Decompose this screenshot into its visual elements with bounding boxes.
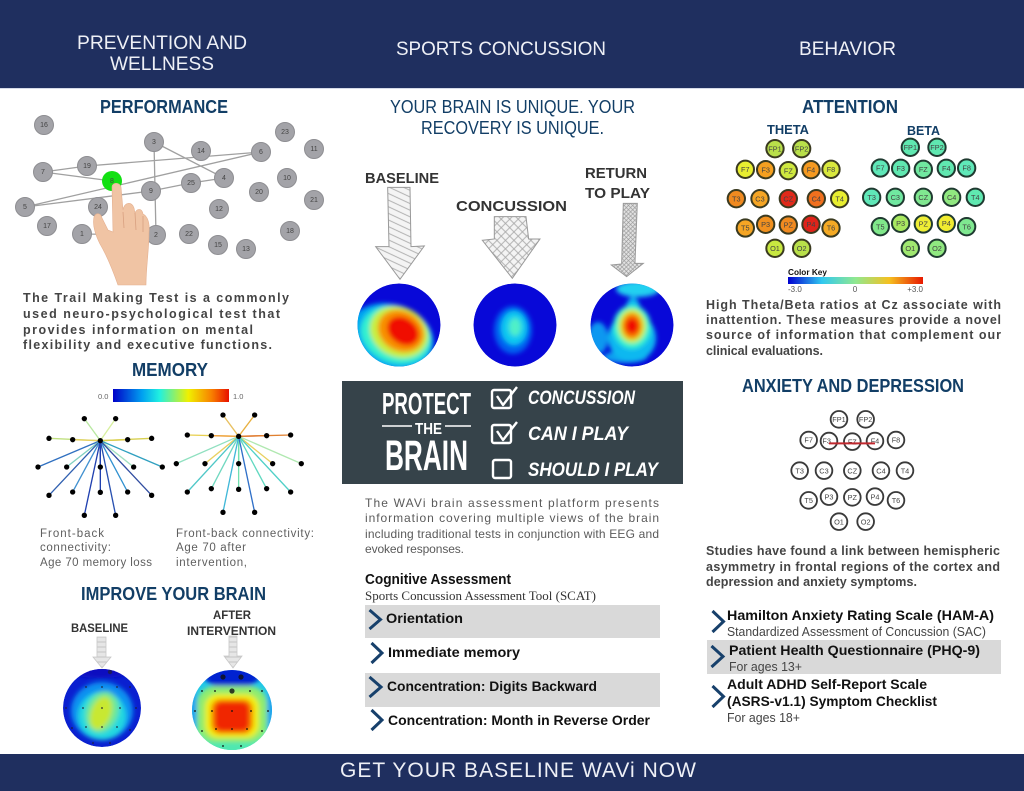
trail making test diagram: 11 <box>310 146 318 153</box>
chart: frontal asymmetry electrode map <box>791 411 913 530</box>
text: hemispheric asymmetry description: asymmetry in frontal regions of the cortex and <box>706 560 1000 574</box>
chart: theta electrode map: PZ <box>784 221 794 230</box>
heading: your brain is unique <box>390 97 635 138</box>
connectivity color bar <box>98 389 243 402</box>
list: rating scales: For ages 18+ <box>727 711 800 725</box>
label: return to play <box>585 165 650 202</box>
trail making test diagram: 14 <box>197 148 205 155</box>
chart: theta electrode map: F3 <box>761 165 770 174</box>
list: SCAT items: Orientation <box>386 610 463 626</box>
trail making test diagram <box>16 116 324 285</box>
heading: attention: ATTENTION <box>802 97 898 117</box>
label: after intervention: INTERVENTION <box>187 624 276 638</box>
trail making test diagram: 15 <box>214 242 222 249</box>
chart: frontal asymmetry electrode map: T6 <box>892 496 900 505</box>
chart: theta electrode map: F4 <box>807 165 815 174</box>
trail making test diagram: 9 <box>149 188 153 195</box>
trail making test diagram: 18 <box>286 228 294 235</box>
heatmap: baseline <box>358 284 440 366</box>
text: platform description: information covering multiple views of the brain <box>365 511 659 525</box>
heading: your brain is unique: YOUR BRAIN IS UNIQUE. YOUR <box>390 97 635 117</box>
chart: beta electrode map: FP2 <box>930 143 944 152</box>
chart: frontal asymmetry electrode map: F8 <box>892 436 900 445</box>
subheading: SCAT: Sports Concussion Assessment Tool (SCAT) <box>365 588 596 603</box>
label: beta: BETA <box>907 123 941 138</box>
trail making test diagram: 17 <box>43 223 51 230</box>
chart: frontal asymmetry electrode map: C4 <box>876 466 886 475</box>
text: theta beta description: High Theta/Beta ratios at Cz associate with <box>706 298 1001 312</box>
chart: beta electrode map: F3 <box>896 164 905 173</box>
trail making test diagram: 4 <box>222 175 226 182</box>
text: trail making test description: The Trail Making Test is a commonly <box>23 291 289 305</box>
heatmap: return to play <box>588 281 674 366</box>
trail making test diagram: 12 <box>215 206 223 213</box>
caption: memory loss: connectivity: <box>40 542 111 554</box>
chart: frontal asymmetry electrode map: O1 <box>834 517 844 526</box>
chart: theta electrode map: FP2 <box>795 144 808 153</box>
panel: sports concussion <box>339 97 683 730</box>
caption: memory loss: Front-back <box>40 528 104 540</box>
banner: protect the brain chalkboard <box>342 381 683 484</box>
heatmap: concussion <box>474 284 556 366</box>
color key legend: 0 <box>853 285 858 294</box>
chart: beta electrode map: T3 <box>867 193 876 202</box>
trail making test diagram: 6 <box>259 149 263 156</box>
header: prevention and wellness: PREVENTION AND <box>77 33 247 54</box>
chart: beta electrode map: FZ <box>919 165 928 174</box>
arrow: after intervention <box>224 636 242 668</box>
checklist: CAN I PLAY <box>528 424 630 445</box>
chart: frontal asymmetry electrode map: O2 <box>861 517 871 526</box>
trail making test diagram: 5 <box>23 204 27 211</box>
text: theta beta description: clinical evaluations. <box>706 344 823 358</box>
text: trail making test description: provides information on mental <box>23 323 253 337</box>
label: baseline: BASELINE <box>365 170 439 187</box>
chart: theta electrode map: T6 <box>827 224 835 233</box>
caption: after intervention: Age 70 after <box>176 542 246 554</box>
footer call to action: GET YOUR BASELINE WAVi NOW <box>340 759 696 782</box>
checklist: SHOULD I PLAY <box>528 460 660 481</box>
chart: theta electrode map <box>728 140 848 257</box>
label: after intervention: AFTER <box>213 608 251 622</box>
chart: beta electrode map: P3 <box>896 219 905 228</box>
chart: frontal asymmetry electrode map: PZ <box>848 493 858 502</box>
chart: frontal asymmetry electrode map: FP2 <box>859 415 872 424</box>
chart: beta electrode map: CZ <box>918 193 929 202</box>
trail making test diagram: 25 <box>187 180 195 187</box>
footer banner <box>0 754 1024 791</box>
label: baseline: BASELINE <box>71 621 128 635</box>
text: theta beta description: inattention. These measures provide a novel <box>706 313 1001 327</box>
list: rating scales: Patient Health Questionnaire (PHQ-9) <box>729 642 980 658</box>
arrow: baseline <box>93 637 111 668</box>
chart: frontal asymmetry electrode map: T5 <box>804 496 813 505</box>
trail making test diagram: 7 <box>41 169 45 176</box>
color key legend: +3.0 <box>907 285 924 294</box>
caption: memory loss <box>40 528 152 569</box>
text: hemispheric asymmetry description: depression and anxiety symptoms. <box>706 575 917 589</box>
heading: cognitive assessment: Cognitive Assessment <box>365 572 511 588</box>
trail making test diagram: 21 <box>310 197 318 204</box>
header: prevention and wellness <box>77 33 247 75</box>
chart: frontal asymmetry electrode map: F7 <box>804 436 813 445</box>
label: return to play: RETURN <box>585 165 647 182</box>
chart: beta electrode map: C3 <box>891 193 900 202</box>
chart: beta electrode map: T6 <box>962 222 971 231</box>
label: return to play: TO PLAY <box>585 185 650 202</box>
list: SCAT items: Immediate memory <box>388 644 520 660</box>
trail making test diagram: 13 <box>242 246 250 253</box>
connectivity color bar: 0.0 <box>98 392 108 401</box>
chart: beta electrode map: T5 <box>876 222 885 231</box>
chart: theta electrode map: F8 <box>827 165 835 174</box>
trail making test diagram: 20 <box>255 189 263 196</box>
trail making test diagram: 8 <box>110 178 114 185</box>
header: prevention and wellness: WELLNESS <box>110 54 214 75</box>
caption: after intervention: intervention, <box>176 557 247 569</box>
text: platform description: evoked responses. <box>365 542 464 556</box>
trail making test diagram: 24 <box>94 204 102 211</box>
text: platform description: The WAVi brain assessment platform presents <box>365 496 659 510</box>
trail making test diagram: 23 <box>281 129 289 136</box>
text: theta beta description <box>706 298 1001 358</box>
header banner <box>0 0 1024 89</box>
arrow: return to play <box>611 203 643 277</box>
chart: theta electrode map: O1 <box>770 244 780 253</box>
chart: theta electrode map: CZ <box>783 194 794 203</box>
text: hemispheric asymmetry description <box>706 544 1000 589</box>
trail making test diagram: 16 <box>40 122 48 129</box>
arrow: baseline <box>376 187 424 279</box>
label: after intervention <box>187 608 276 638</box>
trail making test diagram: 22 <box>185 231 193 238</box>
chart: beta electrode map: O1 <box>905 244 915 253</box>
chart: frontal asymmetry electrode map: FP1 <box>832 415 846 424</box>
title: protect the brain: PROTECT <box>382 386 471 421</box>
chart: theta electrode map: F7 <box>741 165 750 174</box>
list: SCAT items: Concentration: Digits Backward <box>387 678 597 694</box>
heading: performance: PERFORMANCE <box>100 97 228 117</box>
chart: frontal asymmetry electrode map: F4 <box>871 437 879 446</box>
checklist: CONCUSSION <box>528 388 636 409</box>
panel: prevention and wellness <box>16 97 324 756</box>
heading: memory: MEMORY <box>132 360 208 380</box>
chart: theta electrode map: T5 <box>741 224 750 233</box>
header: behavior: BEHAVIOR <box>799 39 896 60</box>
chart: theta electrode map: FZ <box>784 166 793 175</box>
chart: beta electrode map: C4 <box>947 193 956 202</box>
chart: theta electrode map: T3 <box>732 194 741 203</box>
chart: beta electrode map: F4 <box>942 164 951 173</box>
label: concussion: CONCUSSION <box>456 198 567 215</box>
icon: pointing hand <box>93 183 149 285</box>
chart: frontal asymmetry electrode map: F3 <box>822 437 831 446</box>
trail making test diagram: 3 <box>152 139 156 146</box>
chart: frontal asymmetry electrode map: T3 <box>795 466 804 475</box>
text: trail making test description: used neuro-psychological test that <box>23 307 281 321</box>
chart: theta electrode map: O2 <box>797 244 807 253</box>
list: rating scales: Hamilton Anxiety Rating Scale (HAM-A) <box>727 607 994 623</box>
list: rating scales <box>707 607 1001 725</box>
color key legend <box>788 267 924 294</box>
title: protect the brain: THE <box>415 421 442 438</box>
chart: theta electrode map: C3 <box>755 194 765 203</box>
text: platform description: including traditional tests in conjunction with EEG and <box>365 527 659 541</box>
chart: beta electrode map <box>863 139 984 257</box>
text: trail making test description <box>23 291 289 352</box>
color key legend: -3.0 <box>788 285 802 294</box>
chart: frontal asymmetry electrode map: P3 <box>825 492 833 501</box>
heading: your brain is unique: RECOVERY IS UNIQUE. <box>421 118 604 138</box>
chart: beta electrode map: FP1 <box>904 143 917 152</box>
connectivity color bar: 1.0 <box>233 392 243 401</box>
chart: beta electrode map: F7 <box>876 164 885 173</box>
text: trail making test description: flexibility and executive functions. <box>23 338 272 352</box>
chart: beta electrode map: P4 <box>942 219 951 228</box>
heading: improve your brain: IMPROVE YOUR BRAIN <box>81 584 266 604</box>
trail making test diagram: 10 <box>283 175 291 182</box>
list: rating scales: Adult ADHD Self-Report Scale <box>727 676 927 692</box>
chart: theta electrode map: P4 <box>807 220 815 229</box>
chart: beta electrode map: O2 <box>932 244 942 253</box>
heatmap: after intervention brain <box>192 670 272 750</box>
title: protect the brain <box>382 386 471 480</box>
heatmap: baseline brain <box>63 664 141 748</box>
list: rating scales: For ages 13+ <box>729 660 802 674</box>
chart: frontal asymmetry electrode map: T4 <box>901 466 909 475</box>
chart: connectivity after intervention <box>174 412 304 515</box>
trail making test diagram: 19 <box>83 163 91 170</box>
caption: after intervention <box>176 528 314 569</box>
list: rating scales: (ASRS-v1.1) Symptom Checklist <box>727 693 937 709</box>
chart: theta electrode map: T4 <box>835 194 844 203</box>
chart: beta electrode map: T4 <box>971 193 980 202</box>
text: theta beta description: source of information that complement our <box>706 328 1001 342</box>
chart: theta electrode map: P3 <box>761 220 770 229</box>
checklist <box>492 387 660 481</box>
chart: frontal asymmetry electrode map: CZ <box>847 466 858 475</box>
color key legend: Color Key <box>788 267 827 277</box>
chart: frontal asymmetry electrode map: P4 <box>870 492 879 501</box>
chart: theta electrode map: C4 <box>812 194 821 203</box>
list: SCAT items <box>365 605 660 730</box>
label: theta: THETA <box>767 122 810 137</box>
header: sports concussion: SPORTS CONCUSSION <box>396 39 606 60</box>
chart: frontal asymmetry electrode map: FZ <box>848 437 857 446</box>
text: hemispheric asymmetry description: Studies have found a link between hemispheric <box>706 544 1000 558</box>
list: rating scales: Standardized Assessment of Concussion (SAC) <box>727 625 986 639</box>
arrow: concussion <box>482 217 540 278</box>
panel: behavior <box>706 97 1001 725</box>
chart: connectivity at age 70 memory loss <box>35 416 165 518</box>
list: SCAT items: Concentration: Month in Reverse Order <box>388 712 651 728</box>
caption: memory loss: Age 70 memory loss <box>40 557 152 569</box>
chart: theta electrode map: FP1 <box>768 144 782 153</box>
chart: beta electrode map: PZ <box>919 220 929 229</box>
text: platform description <box>365 496 659 556</box>
trail making test diagram: 2 <box>154 232 158 239</box>
chart: beta electrode map: F8 <box>962 164 971 173</box>
chart: frontal asymmetry electrode map: C3 <box>819 466 829 475</box>
title: protect the brain: BRAIN <box>385 432 468 480</box>
heading: anxiety and depression: ANXIETY AND DEPRESSION <box>742 376 964 396</box>
caption: after intervention: Front-back connectivity: <box>176 528 314 540</box>
trail making test diagram: 1 <box>80 231 84 238</box>
